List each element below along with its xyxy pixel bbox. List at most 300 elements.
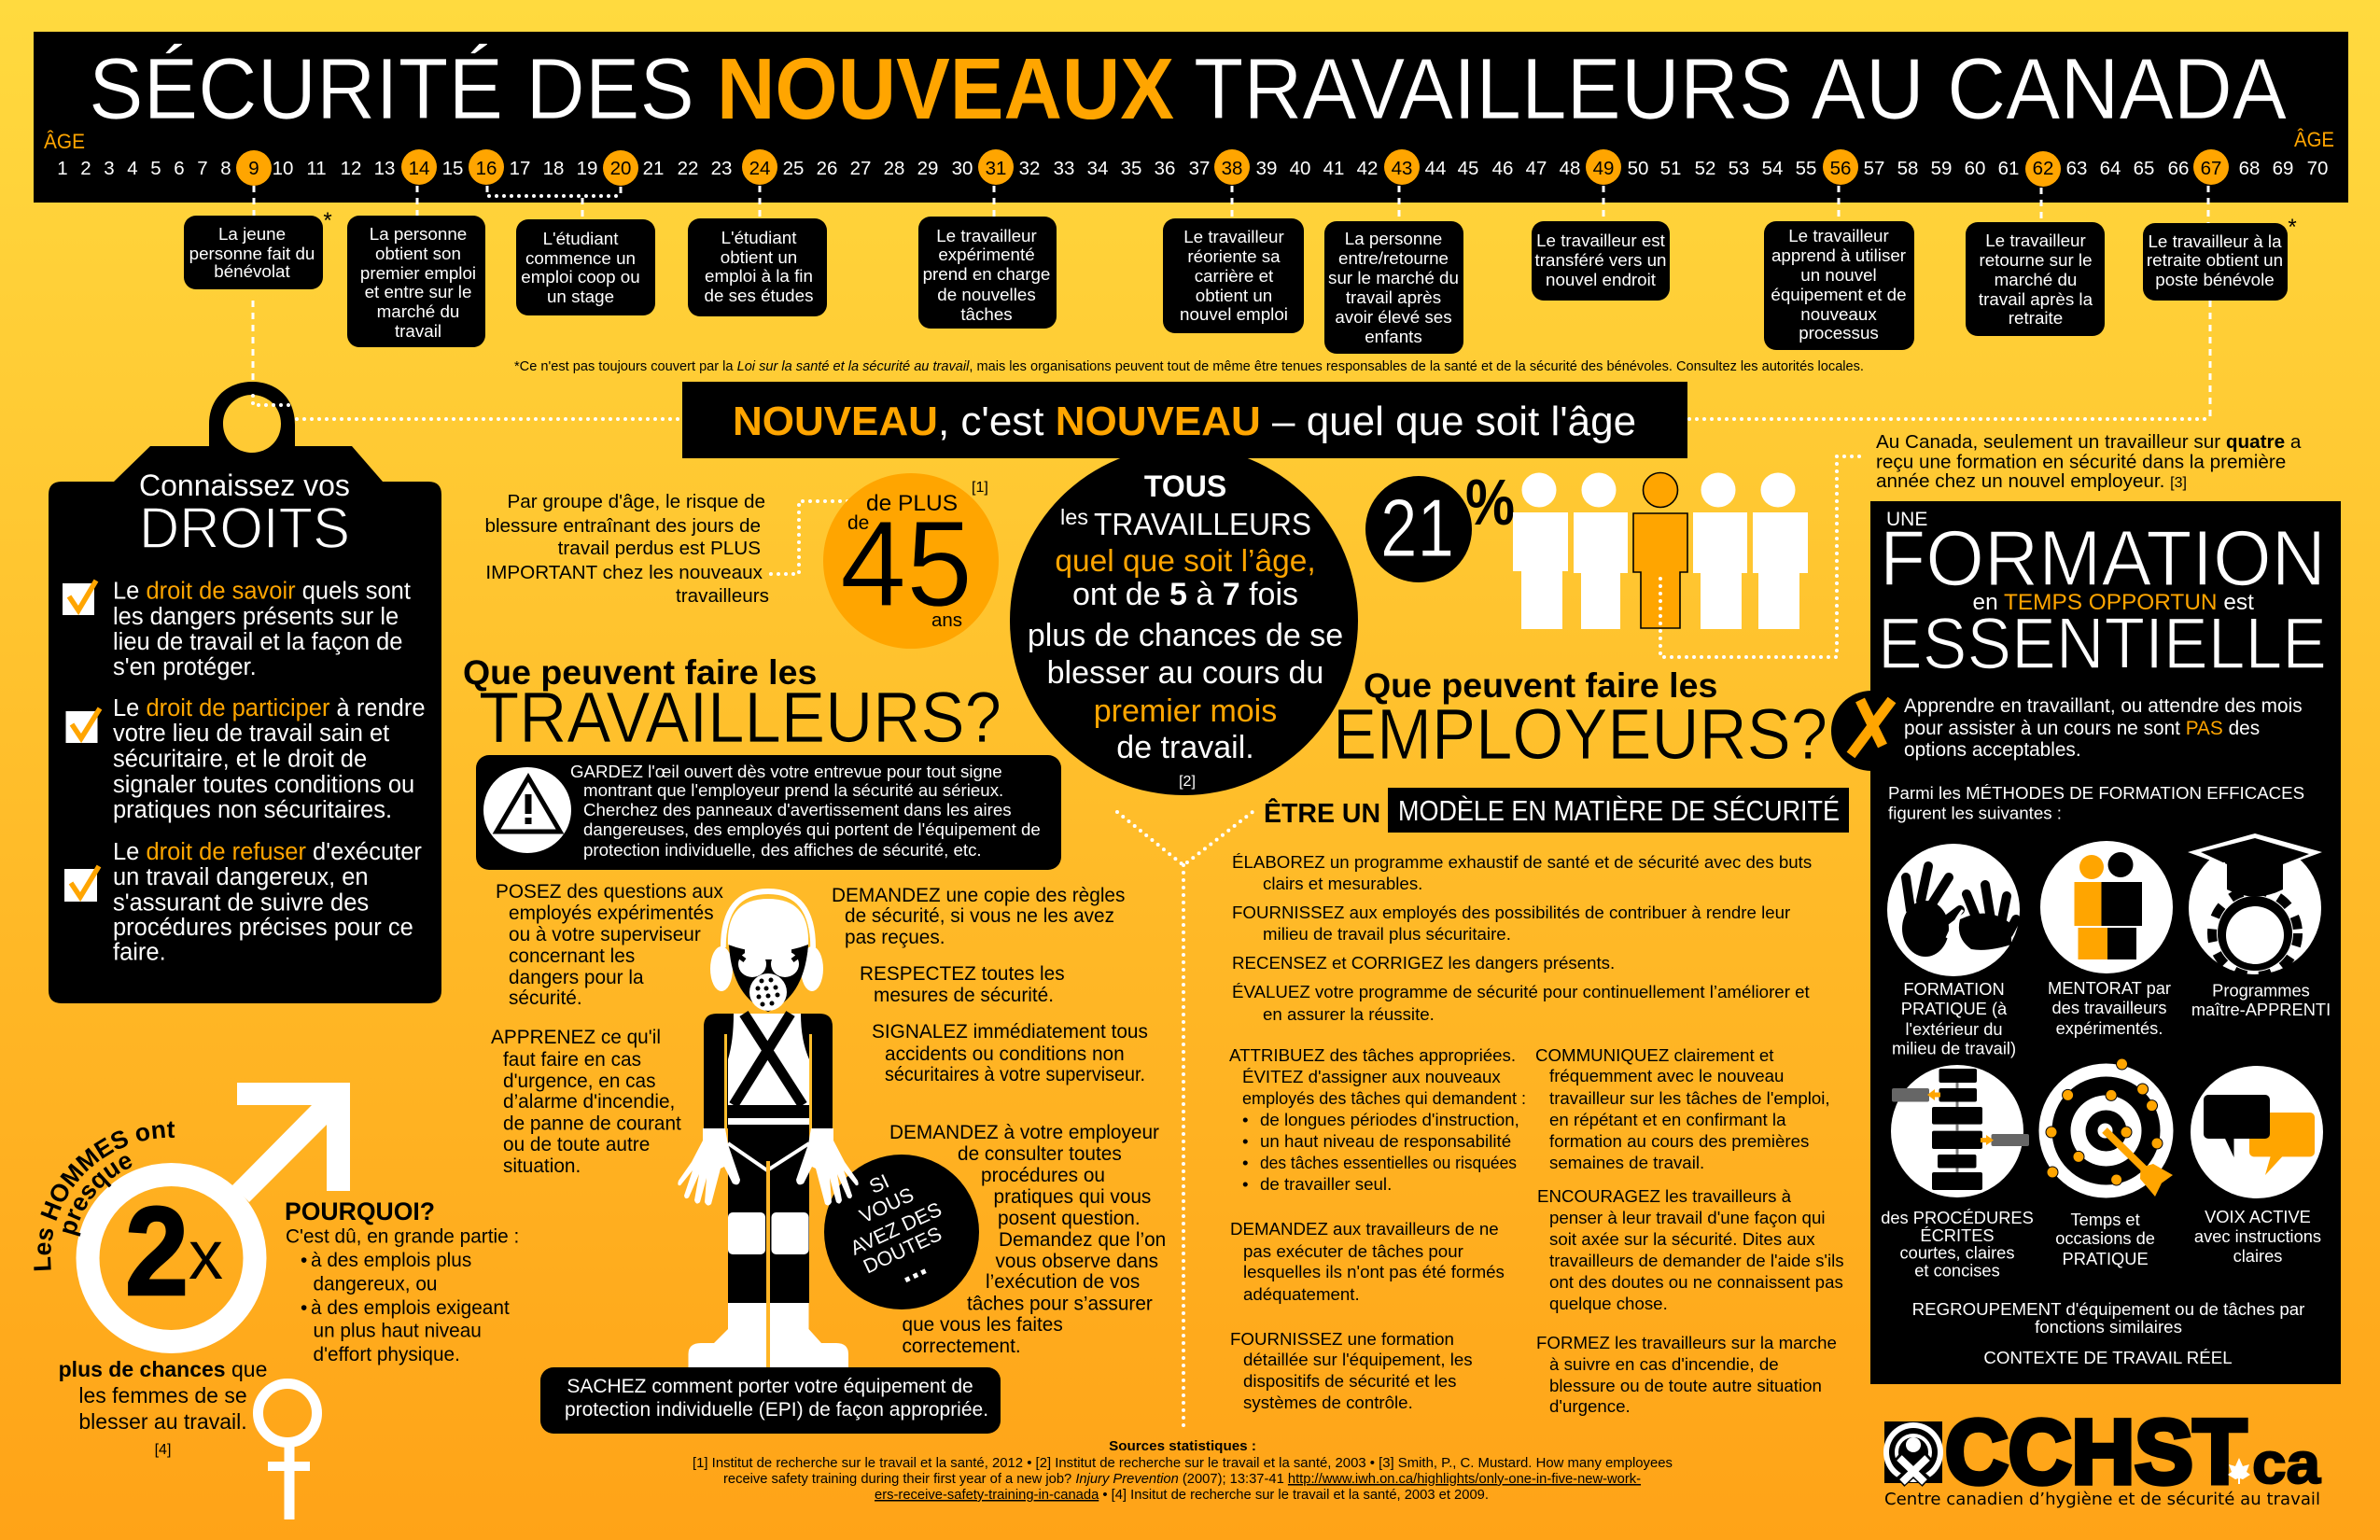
worker advice text left: ou à votre superviseur — [509, 924, 701, 945]
central circle: all workers: [2] — [1179, 774, 1196, 790]
comparison text: [4] — [155, 1442, 171, 1458]
age scale numbers: 32 — [1019, 158, 1040, 179]
badge: if in doubt: SI — [866, 1169, 892, 1198]
worker advice text right: pratiques qui vous — [993, 1186, 1151, 1208]
comparison text: plus de chances que — [59, 1357, 267, 1381]
knee pads — [728, 1212, 808, 1254]
stat text: age group risk: blessure entraînant des jours de — [484, 515, 761, 537]
employer actions column 2: COMMUNIQUEZ clairement et — [1535, 1045, 1774, 1065]
event age 14: La personne — [370, 224, 467, 244]
heading: be a model: ÊTRE UN — [1264, 799, 1380, 829]
title: SÉCURITÉ DES — [89, 40, 694, 137]
check icon 3 — [64, 866, 99, 902]
logo: CCHST: Centre canadien d’hygiène et de sécurité au travail — [1884, 1490, 2320, 1509]
age scale numbers: 31 — [986, 158, 1006, 179]
event age 31: tâches — [960, 304, 1013, 324]
event age 16-20 — [516, 219, 655, 315]
banner: nouveau — [682, 382, 1687, 795]
central circle: all workers: ont de 5 à 7 fois — [1072, 577, 1298, 612]
badge: if in doubt: ... — [892, 1247, 931, 1290]
event age 62: retourne sur le — [1979, 250, 2093, 270]
right to know: lieu de travail et la façon de — [113, 629, 402, 655]
employer actions column 1: FOURNISSEZ une formation — [1230, 1329, 1454, 1349]
right to refuse: Le droit de refuser d'exécuter — [113, 839, 422, 865]
age scale numbers: 69 — [2273, 158, 2293, 179]
age scale numbers: 1 — [57, 158, 68, 179]
employer actions column 1: pas exécuter de tâches pour — [1243, 1241, 1463, 1261]
central circle: all workers — [1010, 446, 1358, 795]
leg gap — [766, 1161, 770, 1367]
event age 43: avoir élevé ses — [1335, 307, 1452, 327]
age scale numbers: 53 — [1729, 158, 1749, 179]
employer actions column 1: de travailler seul. — [1260, 1174, 1392, 1194]
statistic 21 percent — [1365, 456, 1862, 657]
age scale numbers: 48 — [1560, 158, 1580, 179]
event age 67 — [2143, 223, 2288, 301]
age scale numbers: 65 — [2134, 158, 2154, 179]
right to participate — [113, 695, 426, 823]
event age 62: retraite — [2009, 308, 2063, 328]
right to refuse: s'assurant de suivre des — [113, 890, 369, 917]
callout: know how to wear PPE — [540, 1367, 1001, 1434]
employer actions column 2: semaines de travail. — [1549, 1153, 1704, 1172]
employer actions column 2: quelque chose. — [1549, 1294, 1668, 1313]
event age 43: travail après — [1346, 287, 1441, 307]
event age 31: expérimenté — [938, 245, 1035, 264]
event age 24: emploi à la fin — [705, 266, 813, 286]
age scale numbers: 16 — [476, 158, 497, 179]
age scale numbers: 46 — [1492, 158, 1513, 179]
age scale numbers: 39 — [1256, 158, 1277, 179]
comparison text: blesser au travail. — [78, 1409, 247, 1434]
age scale numbers: 58 — [1897, 158, 1918, 179]
employer actions column 1: employés des tâches qui demandent : — [1242, 1088, 1526, 1108]
stat text: age group risk: IMPORTANT chez les nouveaux — [485, 562, 763, 583]
event age 24 — [688, 218, 827, 316]
training stat text — [1876, 431, 2302, 492]
method labels row 1: des travailleurs — [2052, 998, 2166, 1017]
why text: un plus haut niveau — [314, 1321, 482, 1342]
employer actions list: clairs et mesurables. — [1263, 874, 1422, 893]
worker advice text right: tâches pour s’assurer — [967, 1294, 1153, 1314]
dotted branch connectors — [1117, 812, 1253, 1426]
male symbol statistic: 2 — [125, 1181, 189, 1322]
icon: orange X — [1851, 700, 1892, 755]
stat text: age group risk: travail perdus est PLUS — [558, 538, 761, 559]
panel heading — [1878, 509, 2327, 684]
employer actions column 1: adéquatement. — [1243, 1284, 1360, 1304]
age scale numbers: 70 — [2307, 158, 2328, 179]
right to participate: signaler toutes conditions ou — [113, 772, 414, 798]
employer actions column 1 — [1229, 1045, 1526, 1412]
worker advice text right: l’exécution de vos — [986, 1271, 1140, 1293]
worker advice text right: vous observe dans — [995, 1251, 1158, 1272]
why text: POURQUOI? — [285, 1197, 435, 1225]
age scale numbers: 11 — [306, 158, 327, 179]
event age 38: réoriente sa — [1187, 246, 1281, 266]
callout: know how to wear PPE: SACHEZ comment porter votre équipement de — [567, 1376, 973, 1397]
why text: à des emplois plus — [311, 1250, 471, 1271]
age scale numbers: 8 — [220, 158, 231, 179]
age scale numbers: 44 — [1425, 158, 1446, 179]
employer actions column 2: à suivre en cas d'incendie, de — [1549, 1354, 1779, 1374]
employer actions column 2: formation au cours des premières — [1549, 1131, 1809, 1151]
badge: over 45: de PLUS — [866, 491, 958, 516]
method labels row 2: ÉCRITES — [1920, 1225, 1995, 1245]
timeline connector lines — [253, 186, 2210, 419]
age label right: ÂGE — [2294, 128, 2334, 151]
age scale numbers: 9 — [248, 158, 259, 179]
age scale numbers: 42 — [1357, 158, 1378, 179]
event age 49: nouvel endroit — [1546, 270, 1657, 289]
effective methods intro: figurent les suivantes : — [1888, 803, 2062, 823]
age scale numbers: 3 — [104, 158, 115, 179]
callout: keep your eyes open: protection individuelle, des affiches de sécurité, etc. — [583, 840, 982, 860]
curved caption: presque — [62, 1155, 133, 1237]
event age 56: processus — [1799, 323, 1879, 343]
statistic 21 percent: 21 — [1380, 482, 1454, 574]
central circle: all workers: premier mois — [1094, 693, 1277, 729]
worker advice text left: POSEZ des questions aux — [496, 881, 724, 903]
five worker figures — [1513, 472, 1808, 629]
why text: d'effort physique. — [314, 1344, 460, 1365]
badge: over 45: ans — [931, 609, 962, 631]
badge: over 45: 45 — [840, 495, 973, 632]
event age 56 — [1764, 221, 1914, 350]
event age 62: travail après la — [1979, 289, 2093, 309]
right to refuse: faire. — [113, 940, 166, 966]
age scale numbers: 41 — [1323, 158, 1344, 179]
event age 67: retraite obtient un — [2147, 250, 2283, 270]
logo: CCHST: ca — [2252, 1432, 2321, 1496]
age scale numbers: 68 — [2239, 158, 2260, 179]
event age 56: Le travailleur — [1788, 226, 1889, 245]
title — [89, 40, 2287, 137]
badge: over 45: de — [847, 512, 869, 534]
right to participate: votre lieu de travail sain et — [113, 721, 389, 747]
age scale numbers — [57, 158, 2328, 179]
age scale numbers: 23 — [711, 158, 732, 179]
event age 49: Le travailleur est — [1536, 231, 1666, 250]
age scale numbers: 36 — [1155, 158, 1175, 179]
event age 14 — [347, 216, 485, 347]
event age 38 — [1163, 218, 1304, 333]
worker advice text right: DEMANDEZ une copie des règles — [832, 885, 1125, 906]
event age 9 — [184, 216, 323, 289]
employer actions column 1: ÉVITEZ d'assigner aux nouveaux — [1242, 1067, 1501, 1086]
employer actions column 2: travailleur sur les tâches de l'emploi, — [1549, 1088, 1830, 1108]
icon: warning triangle — [483, 767, 571, 853]
event age 16-20: emploi coop ou — [521, 267, 640, 287]
right to participate: pratiques non sécuritaires. — [113, 797, 392, 823]
why text: dangereux, ou — [314, 1273, 437, 1295]
heading: DROITS — [139, 497, 350, 561]
worker advice text right: posent question. — [998, 1208, 1141, 1229]
worker advice text left: dangers pour la — [509, 967, 644, 988]
connector new-worker stat to 45 circle — [771, 501, 858, 574]
method labels row 2: courtes, claires — [1900, 1243, 2014, 1262]
callout: know how to wear PPE: protection individuelle (EPI) de façon appropriée. — [565, 1399, 988, 1421]
employer actions column 1: systèmes de contrôle. — [1243, 1393, 1413, 1412]
heading: what workers can do: Que peuvent faire les — [463, 652, 817, 692]
sources: ers-receive-safety-training-in-canada • [4] Insitut de recherche sur le travail et la santé, 2003 et 2009. — [875, 1487, 1489, 1503]
event age 62: marché du — [1995, 270, 2077, 289]
employer actions list: FOURNISSEZ aux employés des possibilités de contribuer à rendre leur — [1232, 903, 1790, 922]
right to know: Le droit de savoir quels sont — [113, 579, 411, 605]
icon: graduation cap and gear — [2188, 833, 2322, 976]
event age 31 — [918, 217, 1057, 329]
title: TRAVAILLEURS AU CANADA — [1194, 40, 2287, 137]
method labels row 2: avec instructions — [2194, 1226, 2321, 1246]
method labels row 2 — [1881, 1207, 2321, 1281]
worker advice text left: d’alarme d'incendie, — [503, 1091, 675, 1113]
tag string dots — [253, 396, 291, 405]
age scale numbers: 35 — [1121, 158, 1141, 179]
central circle: all workers: blesser au cours du — [1047, 655, 1323, 691]
age scale numbers: 12 — [341, 158, 361, 179]
event age 49: transféré vers un — [1535, 250, 1666, 270]
right to know: s'en protéger. — [113, 654, 257, 680]
central circle: all workers: les — [1060, 505, 1088, 529]
event age 9: La jeune — [218, 224, 286, 244]
event age 38: carrière et — [1195, 266, 1274, 286]
worker advice text left: ou de toute autre — [503, 1134, 650, 1155]
icon: target practice — [2038, 1058, 2173, 1198]
why text: • — [301, 1250, 307, 1271]
badge: if in doubt — [824, 1155, 979, 1309]
comparison text: les femmes de se — [78, 1383, 247, 1407]
sources — [693, 1438, 1673, 1503]
worker advice text right: DEMANDEZ à votre employeur — [889, 1122, 1159, 1143]
age label left: ÂGE — [44, 130, 85, 153]
age scale numbers: 51 — [1660, 158, 1681, 179]
effective methods intro — [1888, 783, 2304, 823]
employer actions column 2: d'urgence. — [1549, 1396, 1631, 1416]
male symbol statistic: x — [189, 1216, 223, 1294]
icon: written procedures — [1891, 1065, 2029, 1197]
head and respirator — [710, 891, 823, 1012]
footnote: *Ce n'est pas toujours couvert par la Loi sur la santé et la sécurité au travail, mais les organisations peuvent tout de même être tenues responsables de la santé et de la sécurité des bénévoles. Consultez les autorités locales. — [514, 359, 1864, 374]
age scale numbers: 62 — [2033, 158, 2053, 179]
age scale numbers: 19 — [577, 158, 597, 179]
age scale numbers: 30 — [952, 158, 973, 179]
age scale numbers: 54 — [1762, 158, 1783, 179]
check icon 2 — [65, 708, 100, 743]
event age 24: obtient un — [721, 247, 797, 267]
event age 9: bénévolat — [214, 261, 291, 281]
event age 14: travail — [395, 321, 441, 341]
employer actions list — [1232, 852, 1812, 1024]
event age 16-20: un stage — [547, 287, 614, 306]
employer actions column 1: un haut niveau de responsabilité — [1260, 1131, 1511, 1151]
heading: what employers can do — [1333, 665, 1827, 775]
event age 16-20: commence un — [525, 248, 636, 268]
worker advice text right: procédures ou — [981, 1165, 1105, 1186]
method labels row 2: claires — [2233, 1246, 2282, 1266]
event age 67: poste bénévole — [2155, 270, 2275, 289]
age scale numbers: 15 — [442, 158, 463, 179]
heading: what employers can do: EMPLOYEURS? — [1333, 694, 1827, 775]
age scale numbers: 37 — [1189, 158, 1210, 179]
worker advice text left: faut faire en cas — [503, 1049, 641, 1071]
event age 31: prend en charge — [923, 264, 1050, 284]
panel heading: ESSENTIELLE — [1878, 602, 2327, 684]
method labels row 1: MENTORAT par — [2048, 978, 2171, 998]
employer actions column 2: ENCOURAGEZ les travailleurs à — [1537, 1186, 1792, 1206]
heading: what workers can do: TRAVAILLEURS? — [479, 678, 1001, 758]
callout: keep your eyes open — [476, 755, 1061, 870]
event age 24: L'étudiant — [721, 228, 797, 247]
event age 14: premier emploi — [360, 263, 476, 283]
age scale numbers: 13 — [374, 158, 395, 179]
event age 31: Le travailleur — [936, 226, 1037, 245]
event age 38: Le travailleur — [1183, 227, 1284, 246]
effective methods intro: Parmi les MÉTHODES DE FORMATION EFFICACES — [1888, 783, 2304, 803]
age scale numbers: 29 — [917, 158, 938, 179]
age scale numbers: 2 — [80, 158, 91, 179]
age scale numbers: 43 — [1392, 158, 1412, 179]
right to know — [113, 579, 411, 680]
event age 14: marché du — [377, 301, 459, 321]
central circle: all workers: TOUS — [1144, 469, 1226, 503]
employer actions column 2: fréquemment avec le nouveau — [1549, 1066, 1784, 1085]
central circle: all workers: de travail. — [1116, 730, 1254, 765]
age scale numbers: 26 — [817, 158, 837, 179]
employer actions list: RECENSEZ et CORRIGEZ les dangers présents. — [1232, 953, 1615, 973]
age scale numbers: 60 — [1965, 158, 1985, 179]
heading: be a model: MODÈLE EN MATIÈRE DE SÉCURITÉ — [1398, 794, 1840, 827]
method labels row 2: des PROCÉDURES — [1881, 1208, 2034, 1227]
right to participate: Le droit de participer à rendre — [113, 695, 426, 721]
event age 67: Le travailleur à la — [2148, 231, 2282, 251]
age scale numbers: 63 — [2066, 158, 2087, 179]
worker advice text left: de panne de courant — [503, 1113, 681, 1135]
connector to training text — [1660, 456, 1862, 657]
not acceptable text — [1904, 695, 2303, 761]
why text: à des emplois exigeant — [311, 1297, 510, 1319]
central circle: all workers: plus de chances de se — [1028, 618, 1343, 653]
title banner — [34, 32, 2348, 203]
icon: hands — [1887, 844, 2020, 976]
event age 62 — [1966, 222, 2105, 336]
worker advice text right: que vous les faites — [902, 1314, 1063, 1336]
training stat text: Au Canada, seulement un travailleur sur quatre a — [1876, 431, 2302, 453]
method labels row 1: FORMATION — [1903, 979, 2005, 999]
age scale numbers: 22 — [678, 158, 698, 179]
age scale numbers: 52 — [1695, 158, 1715, 179]
age scale numbers: 34 — [1087, 158, 1108, 179]
callout: keep your eyes open: dangereuses, des employés qui portent de l'équipement de — [583, 819, 1041, 839]
badge: if in doubt: VOUS — [856, 1183, 917, 1227]
sources: [1] Institut de recherche sur le travail et la santé, 2012 • [2] Institut de recherche sur le travail et la santé, 2003 • [3] Smith, P., C. Mustard. How many employees — [693, 1455, 1673, 1471]
employer actions column 1: • — [1242, 1131, 1249, 1151]
heading: Connaissez vos — [139, 469, 350, 502]
not acceptable text: Apprendre en travaillant, ou attendre des mois — [1904, 695, 2303, 717]
method labels row 1: expérimentés. — [2056, 1018, 2163, 1038]
icon: female symbol — [258, 1383, 317, 1519]
event age 56: apprend à utiliser — [1771, 245, 1906, 265]
employer actions column 2: travailleurs de demander de l'aide s'ils — [1549, 1251, 1844, 1270]
age scale numbers: 7 — [197, 158, 208, 179]
age scale numbers: 17 — [510, 158, 530, 179]
badge: over 45 — [823, 473, 999, 649]
event age 43 — [1324, 221, 1463, 354]
worker advice text left: concernant les — [509, 945, 635, 967]
age scale numbers: 49 — [1593, 158, 1614, 179]
method labels row 1: maître-APPRENTI — [2191, 1000, 2331, 1019]
worker advice text right: pas reçues. — [845, 927, 945, 948]
employer actions column 1: ATTRIBUEZ des tâches appropriées. — [1229, 1045, 1516, 1065]
method labels row 1: PRATIQUE (à — [1901, 999, 2008, 1018]
employer actions column 2: soit axée sur la sécurité. Dites aux — [1549, 1229, 1815, 1249]
employer actions column 2: blessure ou de toute autre situation — [1549, 1376, 1822, 1395]
method labels row 1: milieu de travail) — [1892, 1038, 2016, 1058]
event age 31: de nouvelles — [937, 285, 1036, 304]
age scale numbers: 6 — [174, 158, 185, 179]
employer actions column 2: FORMEZ les travailleurs sur la marche — [1536, 1333, 1837, 1352]
age scale numbers: 25 — [783, 158, 804, 179]
panel: training — [1831, 501, 2341, 1384]
icon: male symbol — [88, 1083, 350, 1342]
event age 62: Le travailleur — [1985, 231, 2086, 250]
age scale numbers: 27 — [850, 158, 871, 179]
more methods: REGROUPEMENT d'équipement ou de tâches par — [1912, 1299, 2304, 1319]
method labels row 2: occasions de — [2055, 1228, 2155, 1248]
age scale numbers: 55 — [1796, 158, 1816, 179]
event age 56: équipement et de — [1771, 285, 1907, 304]
event age 56: un nouvel — [1800, 265, 1877, 285]
worker advice text left: sécurité. — [509, 987, 582, 1009]
worker advice text right: correctement. — [902, 1336, 1021, 1357]
age scale numbers: 56 — [1830, 158, 1851, 179]
worker advice text left: APPRENEZ ce qu'il — [491, 1027, 661, 1048]
worker advice text right: sécuritaires à votre superviseur. — [885, 1064, 1145, 1085]
employer actions column 1: • — [1242, 1110, 1249, 1129]
age highlight circles — [236, 149, 2229, 187]
event age 43: La personne — [1345, 229, 1442, 248]
heading: be a model — [1264, 788, 1849, 833]
event age 56: nouveaux — [1800, 304, 1877, 324]
why text — [285, 1197, 519, 1365]
age scale numbers: 33 — [1054, 158, 1074, 179]
stat text: age group risk — [484, 491, 769, 607]
worker advice text right: SIGNALEZ immédiatement tous — [872, 1021, 1148, 1043]
panel heading: en TEMPS OPPORTUN est — [1973, 590, 2254, 615]
illustration: worker with protective equipment — [678, 891, 859, 1367]
stat text: age group risk: travailleurs — [676, 585, 769, 607]
body suit — [704, 1014, 833, 1303]
method labels row 2: Temps et — [2071, 1210, 2140, 1229]
method labels row 2: PRATIQUE — [2063, 1249, 2149, 1268]
training stat text: année chez un nouvel employeur. [3] — [1876, 470, 2187, 492]
employer actions column 1: des tâches essentielles ou risquées — [1260, 1153, 1517, 1172]
worker advice text left: d'urgence, en cas — [503, 1071, 656, 1092]
age scale numbers: 10 — [273, 158, 293, 179]
age scale numbers: 59 — [1931, 158, 1952, 179]
worker advice text right: accidents ou conditions non — [885, 1043, 1125, 1065]
event age 14: et entre sur le — [365, 282, 471, 301]
employer actions column 1: • — [1242, 1153, 1249, 1172]
not acceptable text: pour assister à un cours ne sont PAS des — [1904, 718, 2260, 739]
employer actions column 1: détaillée sur l'équipement, les — [1243, 1350, 1473, 1369]
age scale numbers: 5 — [150, 158, 161, 179]
age scale numbers: 47 — [1526, 158, 1547, 179]
event age 43: enfants — [1365, 327, 1422, 346]
worker advice text left — [491, 881, 724, 1177]
event age 49 — [1532, 221, 1670, 301]
right to refuse: procédures précises pour ce — [113, 915, 413, 941]
employer actions column 1: DEMANDEZ aux travailleurs de ne — [1230, 1219, 1499, 1239]
